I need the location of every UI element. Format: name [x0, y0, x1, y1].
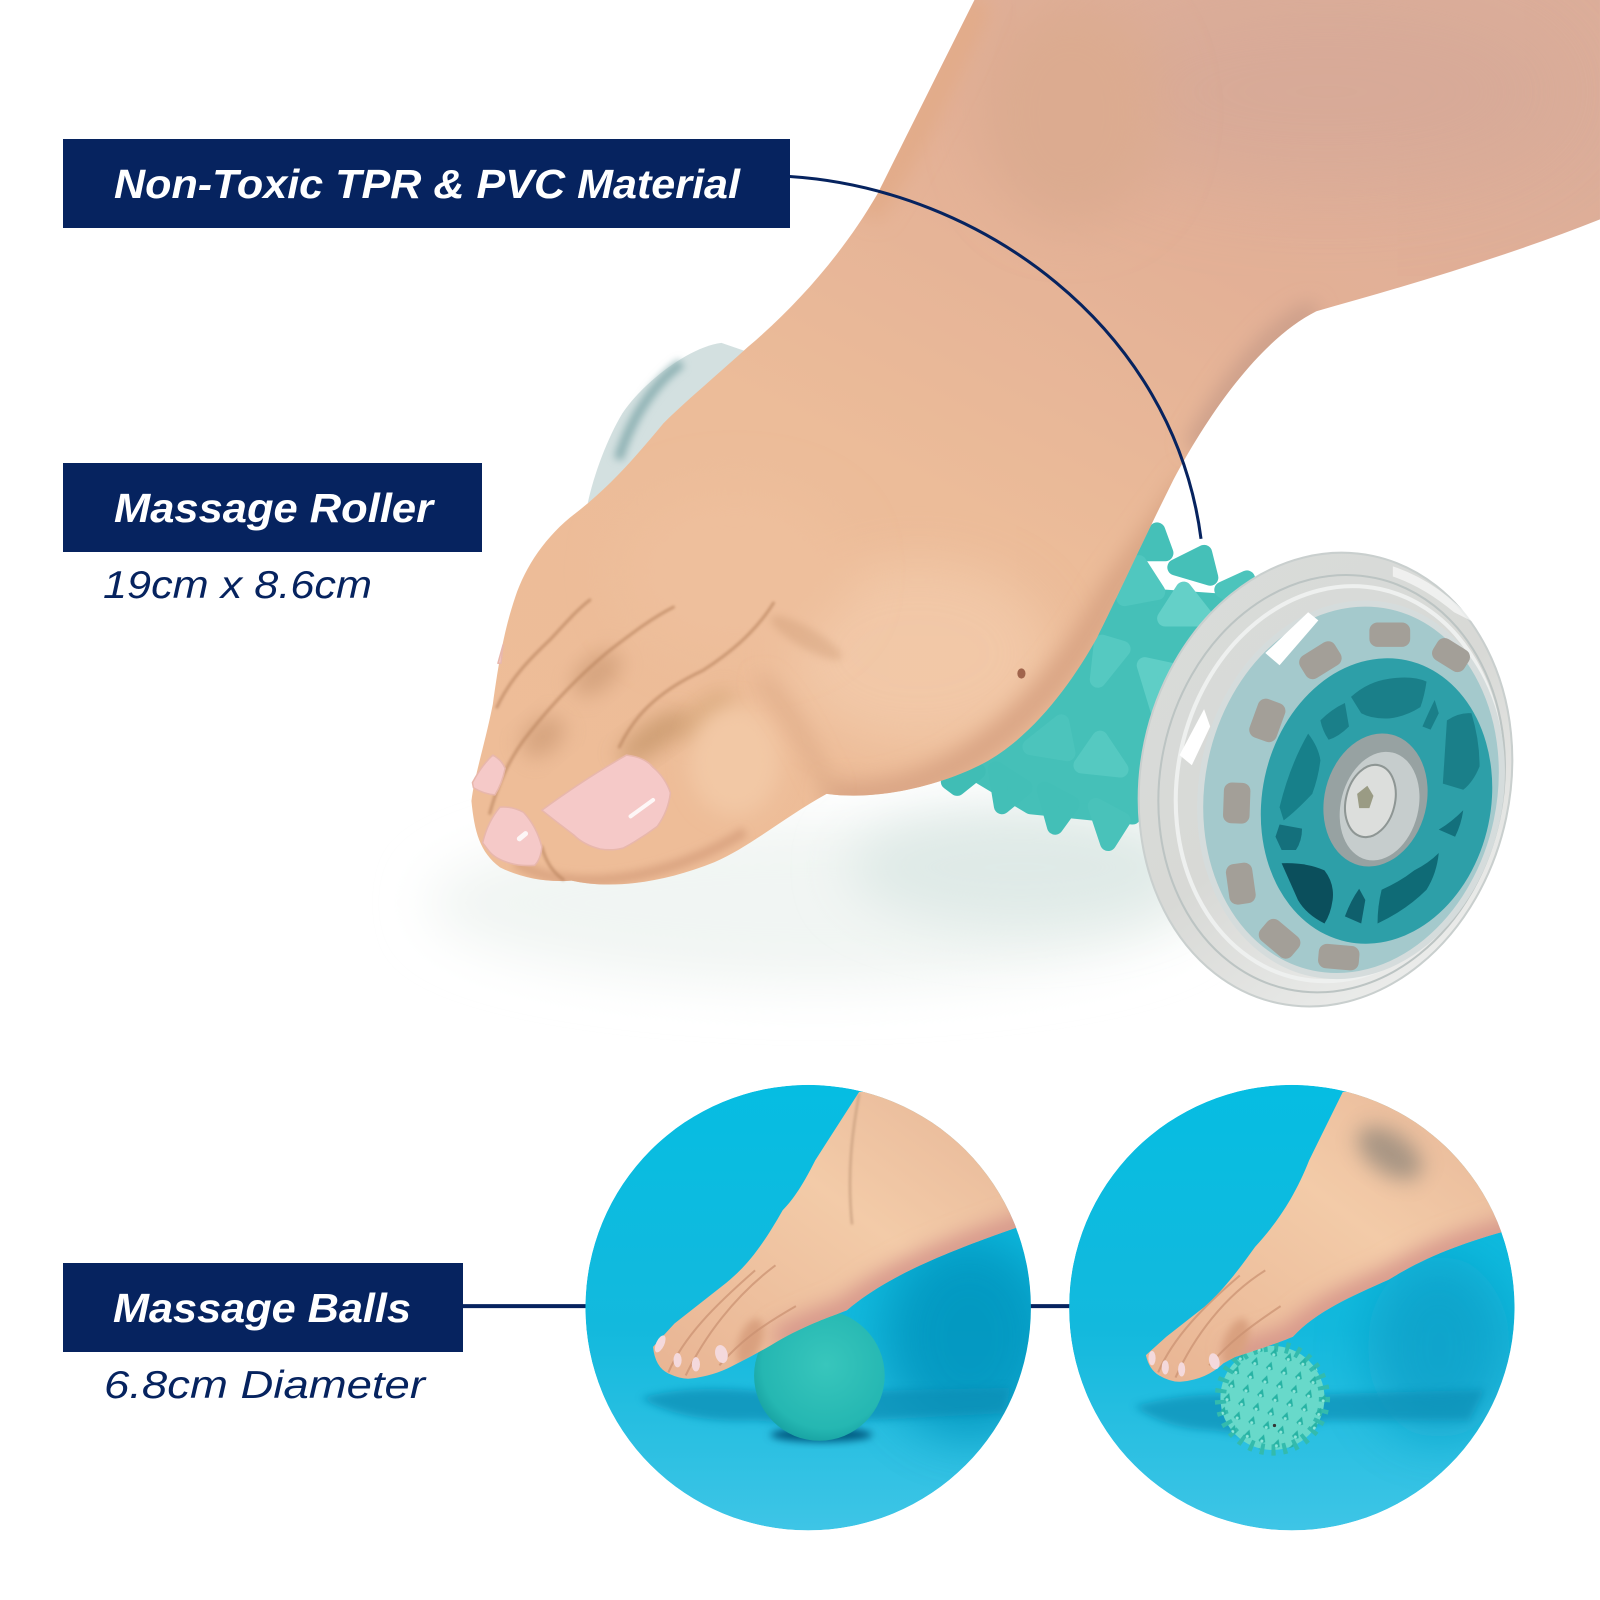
tyre highlights — [1180, 566, 1474, 765]
near roller wheel — [1097, 518, 1554, 1042]
label: non-toxic material — [63, 139, 790, 228]
background shading — [1367, 1255, 1510, 1439]
label: non-toxic material: Non-Toxic TPR & PVC Material — [114, 161, 742, 207]
toenails — [653, 1334, 730, 1371]
smooth ball — [754, 1310, 885, 1441]
teal translucent band — [1166, 575, 1536, 1004]
hub cut-outs — [1276, 678, 1480, 923]
floor shadow — [641, 1388, 1010, 1442]
text: ball diameter: 6.8cm Diameter — [104, 1364, 427, 1407]
photo: foot on massage roller — [429, 0, 1600, 1530]
hub centre — [1310, 722, 1441, 878]
background shading — [883, 1235, 1056, 1439]
clear tyre — [1097, 518, 1554, 1042]
nail highlights — [519, 800, 653, 839]
roller spikes — [949, 531, 1247, 843]
spiky ball — [1219, 1345, 1325, 1451]
straight connector: label to first ball — [462, 1304, 587, 1308]
label: massage balls: Massage Balls — [113, 1285, 411, 1331]
band inserts — [1223, 622, 1473, 971]
foot — [653, 1092, 1041, 1379]
hub ring and spokes — [1235, 637, 1518, 966]
ground shadow — [429, 806, 1204, 985]
mole — [1017, 668, 1026, 679]
toe creases — [490, 600, 773, 880]
text: roller dimensions: 19cm x 8.6cm — [103, 564, 372, 607]
label: massage roller — [63, 463, 482, 552]
toenails — [1148, 1351, 1221, 1377]
foot — [1146, 1092, 1531, 1382]
label: massage roller: Massage Roller — [114, 485, 435, 531]
photo circle: smooth massage ball — [585, 1085, 1056, 1530]
toenails — [472, 645, 670, 866]
photo circle: spiky massage ball — [1069, 1085, 1531, 1530]
floor shadow — [1135, 1390, 1485, 1434]
bolt — [1338, 759, 1403, 843]
foot — [471, 0, 1600, 885]
straight connector: between balls — [1031, 1304, 1070, 1308]
label: massage balls — [63, 1263, 463, 1352]
arc connector line — [790, 177, 1201, 539]
foot shading — [514, 0, 1571, 880]
far roller wheel — [588, 343, 748, 503]
